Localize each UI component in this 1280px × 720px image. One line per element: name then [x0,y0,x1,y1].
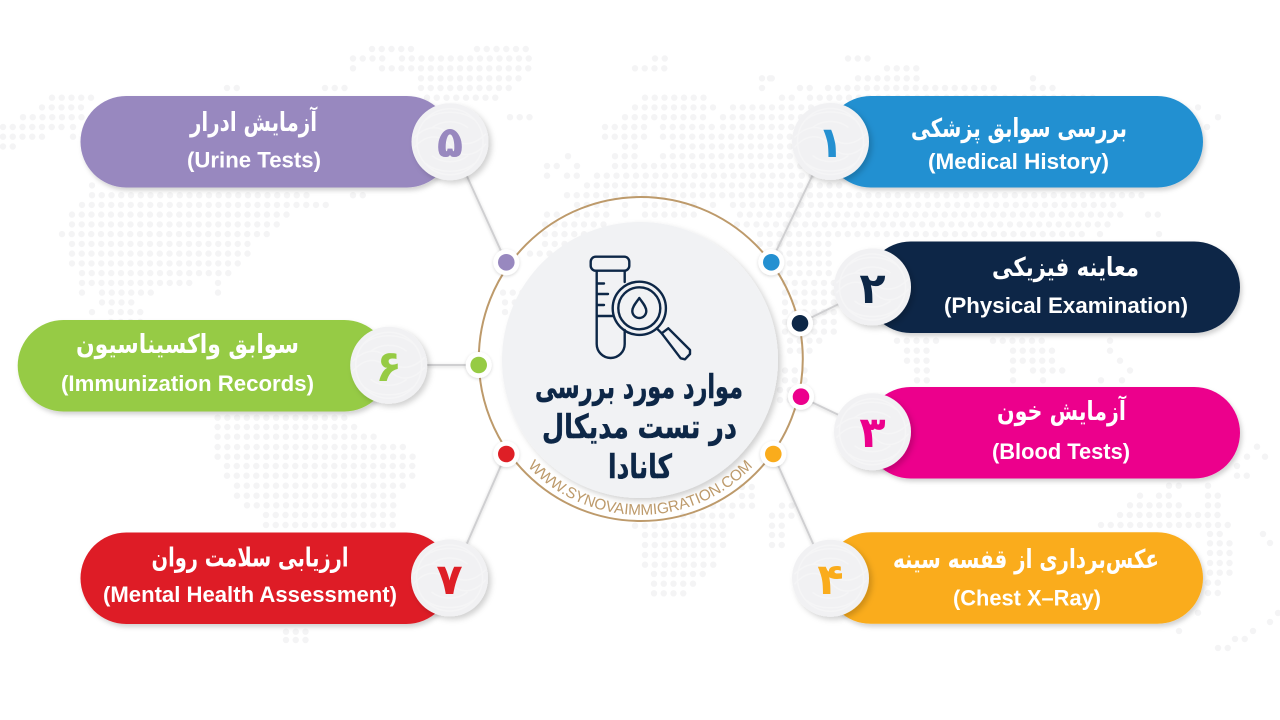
panel: 6 immunization records [18,320,427,412]
connector lines [425,170,845,548]
panel: 1 medical history [792,96,1203,188]
center title [535,367,743,486]
panel: 4 chest x-ray [792,532,1203,624]
panel: 7 mental health assessment [80,532,488,624]
panel: 1 medical history: (Medical History) [928,149,1109,174]
center title: در تست مدیکال [542,407,737,446]
panel: 6 immunization records: سوابق واکسیناسیون [76,330,299,360]
center title: موارد مورد بررسی [535,367,743,407]
panel: 7 mental health assessment: (Mental Health Assessment) [103,582,397,607]
panel: 6 immunization records: ۶ [376,342,402,392]
panel: 2 physical examination: ۲ [859,264,886,314]
panel: 3 blood tests: (Blood Tests) [992,439,1130,464]
panel: 5 urine tests: (Urine Tests) [187,148,321,172]
panel: 2 physical examination: معاینه فیزیکی [992,253,1139,283]
panel: 5 urine tests [80,96,488,188]
panel: 7 mental health assessment: ۷ [436,555,463,605]
outer gold ring [479,197,803,521]
panel: 5 urine tests: آزمایش ادرار [188,106,318,138]
panel: 1 medical history: ۱ [817,118,844,168]
center title: کانادا [608,447,673,486]
connector nodes [466,249,814,467]
panel: 3 blood tests [834,387,1240,478]
panel: 5 urine tests: ۵ [437,118,463,168]
panel: 2 physical examination [834,242,1240,333]
panel: 3 blood tests: ۳ [859,408,886,458]
panel: 4 chest x-ray: ۴ [817,555,844,605]
panel: 7 mental health assessment: ارزیابی سلامت روان [152,544,348,574]
central circle panel [502,222,778,498]
panel: 1 medical history: بررسی سوابق پزشکی [911,114,1127,144]
curved website text: WWW.SYNOVAIMMIGRATION.COM [530,459,752,515]
panel: 2 physical examination: (Physical Examination) [944,293,1188,318]
panel: 4 chest x-ray: عکس‌برداری از قفسه سینه [893,545,1159,575]
panel: 6 immunization records: (Immunization Records) [61,371,314,396]
icon: test tube with magnifier [591,257,690,359]
panel: 4 chest x-ray: (Chest X–Ray) [953,586,1101,610]
panel: 3 blood tests: آزمایش خون [997,395,1127,427]
